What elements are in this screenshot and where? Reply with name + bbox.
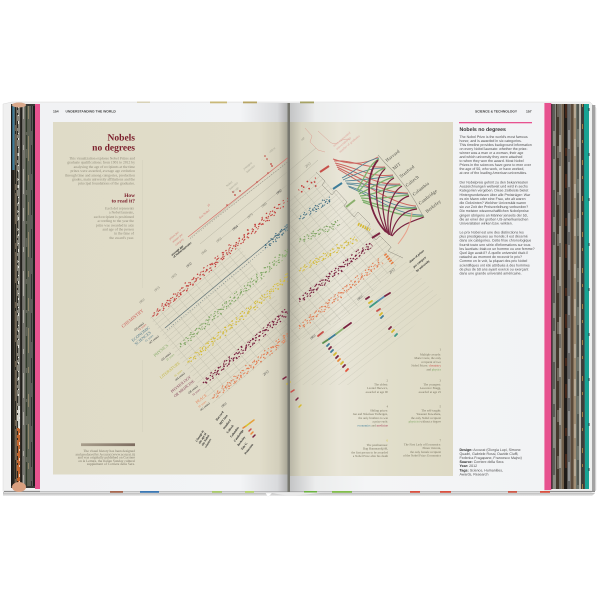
footer note: on la Lettura, the Italian Sunday cultural <box>78 459 135 463</box>
note 5: the only Nobel recipient <box>411 416 441 420</box>
French text: Quel âge avait-il? À quelle université était-il <box>460 250 528 255</box>
year labels: 1901 <box>220 401 228 409</box>
note 2: The oldest: <box>374 382 388 386</box>
page edge colour tabs <box>110 102 550 493</box>
left page header: 154 <box>53 109 59 113</box>
label: economic sciences <box>130 325 160 346</box>
label: physics: 25 years <box>165 352 176 362</box>
year labels: 1992 <box>275 188 283 196</box>
heading: how to read it <box>111 193 135 204</box>
label: physics: (55 years) <box>160 351 172 362</box>
note 3 <box>419 378 441 394</box>
how to read text: Each dot represents <box>105 206 135 210</box>
dark list: category legend: the age of <box>197 431 208 445</box>
year labels: 1985 <box>260 201 268 209</box>
note 5: 5 <box>439 404 441 408</box>
dark list: chart key: share of prizes <box>408 248 426 264</box>
dark list: universities: Yale U. <box>240 441 249 451</box>
top legend: prizes per category: by age <box>231 185 240 194</box>
title: no degrees <box>92 144 135 154</box>
note 1: 1 <box>439 348 441 352</box>
chart grid <box>150 128 442 404</box>
dark list: chart key: per category <box>412 255 427 269</box>
note 4: 4 <box>386 404 388 408</box>
dark list: universities: Cambridge <box>233 428 245 443</box>
year labels: 1901 <box>356 294 364 302</box>
heading: how to read it: to read it? <box>111 198 135 204</box>
German text: sie zur Zeit der Preisverleihung verbunden? <box>460 205 528 209</box>
title <box>92 134 135 154</box>
dark list: category legend <box>194 429 213 449</box>
credits: Awards, Research <box>460 472 488 476</box>
German text: Der Nobelpreis gehört zu den bekanntesten <box>460 180 528 184</box>
label: physics: PHYSICS <box>152 342 170 358</box>
how to read text: according to the year the <box>98 219 134 223</box>
English text: at one of the leading American universities. <box>460 171 527 175</box>
English text: This timeline provides background information <box>460 143 532 147</box>
note 7: 7 <box>439 438 441 442</box>
top legend: prizes per category: winner per <box>171 232 184 244</box>
label: chemistry: 72 years <box>137 322 148 332</box>
note 4: Jan and Nikolaas Tinbergen, <box>353 412 388 416</box>
university flows: burgundy <box>369 160 424 236</box>
year labels: 1975 <box>246 212 254 220</box>
top legend: prizes per category: 26 <box>206 202 211 208</box>
year labels: 2012 <box>262 369 270 377</box>
label: physiology or medicine: PHYSIOLOGY <box>170 375 192 394</box>
left page <box>40 103 290 492</box>
how to read text: and age of the person <box>102 228 134 232</box>
how to read text: a Nobel laureate, <box>109 211 134 215</box>
label: economic sciences: ECONOMIC <box>130 325 151 343</box>
dots: literature <box>187 236 358 363</box>
dark list: universities: Princeton <box>243 443 254 455</box>
label: physiology or medicine: OR MEDICINE <box>173 379 196 398</box>
top legend: prizes per category: prizes per <box>168 230 180 241</box>
note 1: and physics <box>426 367 442 371</box>
top legend: prizes per category: oldest <box>268 146 276 154</box>
pink page edges <box>35 103 551 490</box>
French text: scientifiques ont été attribués à des hommes <box>460 263 530 267</box>
university labels: Cambridge <box>418 188 438 206</box>
university labels: Caltech <box>405 174 420 188</box>
dark list: universities: Harvard <box>215 410 225 422</box>
dots: physiology or medicine <box>202 242 373 384</box>
top legend: prizes per category: first Nobel <box>198 208 211 220</box>
note 1: recipient of two <box>421 360 441 364</box>
university labels: Harvard <box>385 148 401 163</box>
credits: Source: Corriere della Sera <box>460 460 503 464</box>
footer note: The visual history has been designed <box>83 449 135 453</box>
top legend: prizes per category: of Nobel laureates <box>172 240 193 259</box>
university labels: Berkeley <box>425 198 442 214</box>
English text: to when they won the award. Most Nobel <box>460 159 524 163</box>
note 6: Dag Hammarskjöld, <box>363 447 388 451</box>
credits <box>460 448 522 476</box>
English text: winner was a man or a woman, their age <box>460 151 523 155</box>
note 6: 6 <box>386 438 388 442</box>
dark list: universities: Caltech <box>225 424 235 434</box>
year labels: 1925 <box>170 272 178 280</box>
label: peace: 35 years <box>197 399 208 409</box>
label: economic sciences: 61 years <box>144 333 155 343</box>
note 3: The youngest: <box>423 382 441 386</box>
university flows: red <box>333 157 416 206</box>
top legend: prizes per category: Nobel <box>225 180 233 188</box>
English text: Prizes in the sciences have gone to men over <box>460 163 532 167</box>
note 1: Marie Curie, the only <box>414 356 441 360</box>
credits: Tags: Science, Humanities, <box>460 468 503 472</box>
dots: chemistry <box>152 177 317 317</box>
how to read text: in the time of <box>114 232 135 236</box>
French text: Le prix Nobel est une des distinctions les <box>460 230 524 234</box>
German text: Kategorien vergeben. Diese Zeitleiste bietet <box>460 189 528 193</box>
intro text: prizes were awarded, average age evolution <box>70 169 135 173</box>
gutter fold <box>268 103 325 496</box>
note 4: economics and medicine <box>357 423 389 427</box>
note 4 <box>353 404 389 427</box>
French text: dans une grande université américaine. <box>460 272 522 276</box>
intro text: principal foundations of the graduates. <box>78 182 135 186</box>
German text <box>460 180 531 226</box>
footer rule <box>81 443 135 446</box>
year labels: 1964 <box>231 224 239 232</box>
note 6: a Nobel Prize after his death <box>353 454 388 458</box>
label: chemistry: CHEMISTRY <box>120 308 146 330</box>
university bracket <box>378 155 424 218</box>
mini bars: 2012 group <box>283 377 301 407</box>
label: peace: (61 years) <box>199 401 211 412</box>
university labels: MIT <box>392 161 402 171</box>
credits: Design: Accurat (Giorgia Lupi, Simone <box>460 448 521 452</box>
credits: Quadri, Gabriele Rossi, Davide Ciuffi, <box>460 452 518 456</box>
university flows: blue <box>342 158 423 215</box>
top legend: prizes per category: laureates <box>245 163 256 174</box>
right page <box>290 103 544 492</box>
note 6: The posthumous: <box>367 443 388 447</box>
German text: gingen übrigens an Männer jenseits der 50, <box>460 213 528 217</box>
footer note <box>76 449 136 466</box>
right page edge stack <box>551 104 592 490</box>
note 7: The First Lady of Economics: <box>404 442 441 446</box>
note 3: 3 <box>439 378 441 382</box>
note 1: Nobel Prizes: chemistry <box>411 364 441 368</box>
English text: honor, and is awarded in six categories. <box>460 139 522 143</box>
top age line <box>188 155 290 239</box>
top right pink legend: number of graduates <box>338 133 361 154</box>
dark list: category legend: Change in <box>194 429 205 443</box>
intro text: This visualization explores Nobel Prizes and <box>69 156 135 160</box>
top right pink legend: most represented <box>332 131 352 148</box>
top right pink legend: universities by <box>335 135 352 151</box>
dark list: universities <box>215 410 254 455</box>
label: literature: LITERATURE <box>158 360 181 380</box>
mini bars: middle stacked group <box>318 323 351 371</box>
French text: Comme on le voit, la plupart des prix Nobel <box>460 259 528 263</box>
French text: dans six catégories. Cette frise chronologique <box>460 239 531 243</box>
how to read text: each recipient is positioned <box>94 215 134 219</box>
book cover shadow <box>3 102 596 497</box>
note 7 <box>403 438 442 458</box>
label: physiology or medicine <box>170 375 202 398</box>
dark list: category legend: winners <box>203 437 213 449</box>
right page header: SCIENCE & TECHNOLOGY <box>475 109 518 113</box>
note 6 <box>351 438 388 458</box>
category summary bars <box>320 166 393 264</box>
dark list: universities: Columbia <box>229 425 240 438</box>
how to read text <box>94 206 135 240</box>
mini bars: right stacked group <box>366 293 397 336</box>
German text: Die meisten wissenschaftlichen Nobelpreise <box>460 209 529 213</box>
year labels <box>138 161 396 409</box>
how to read text: prize was awarded in axis <box>96 223 135 227</box>
intro text: analysing the age of recipients at the time <box>74 165 135 169</box>
top legend: prizes per category <box>168 146 276 259</box>
note 4: the only brothers to win <box>358 416 388 420</box>
year labels: 1945 <box>200 248 208 256</box>
footer note: and produced by Accurat (www.accurat.it) <box>76 452 136 456</box>
English text <box>460 135 532 175</box>
year labels: 1915 <box>153 285 161 293</box>
left page header: UNDERSTANDING THE WORLD <box>66 109 116 113</box>
note 5 <box>409 404 442 424</box>
top legend: prizes per category: youngest <box>242 161 253 171</box>
note 7: Elinor Ostrom, <box>422 446 441 450</box>
year labels: 1932 <box>185 261 193 269</box>
English text: and which university they were attached <box>460 155 522 159</box>
panel: beige infographic left <box>53 122 288 474</box>
German text: Universitäten wirken bzw. wirkten. <box>460 222 513 226</box>
label: chemistry: (59 years) <box>133 321 145 332</box>
note 4: Sibling prizes: <box>370 408 388 412</box>
pink rule <box>459 122 532 123</box>
university flows: peace <box>398 212 412 244</box>
note 2: awarded at age 90 <box>366 390 388 394</box>
left page edge stack <box>11 102 35 492</box>
intro text <box>65 156 135 186</box>
note 7: of the Nobel Prize: Economics <box>403 454 442 458</box>
dark list: chart key: by university <box>415 259 431 273</box>
dots: peace <box>212 258 384 399</box>
English text: the age of 50, who work, or have worked, <box>460 167 524 171</box>
note 3: Lawrence Bragg, <box>420 386 441 390</box>
label: peace <box>194 392 211 412</box>
note 7: the only female recipient <box>410 450 441 454</box>
year labels: 2012 <box>304 161 312 169</box>
top right pink legend <box>300 131 361 154</box>
how to read text: the award's year. <box>109 236 134 240</box>
German text: Hintergrundwissen über alle Preisträger: War <box>460 193 531 197</box>
note 5: The self-taught: <box>421 408 441 412</box>
intro text: grades, main university affiliations and the <box>72 178 135 182</box>
German text: die an einer der großen US-amerikanischen <box>460 217 528 221</box>
label: literature: 41 years <box>173 368 184 378</box>
top legend: prizes per category: laureates <box>228 180 239 191</box>
dark list: chart key <box>408 248 431 273</box>
French text: les lauréats: était-ce un homme ou une femme? <box>460 247 535 251</box>
note 1: Multiple awards: <box>420 352 441 356</box>
footer note: and was originally published on Corriere <box>78 456 135 460</box>
university labels <box>385 148 442 214</box>
credits: Federica Fragapane, Francesco Majno) <box>460 456 522 460</box>
panel: beige infographic right <box>290 122 453 476</box>
credits: Year: 2012 <box>460 464 477 468</box>
note 4: a prize each: <box>372 420 388 424</box>
label: literature: (64 years) <box>174 371 186 382</box>
note 2: 2 <box>386 378 388 382</box>
dots: economic sciences <box>164 196 330 330</box>
university labels: Columbia <box>412 181 430 197</box>
right page header: 157 <box>526 109 532 113</box>
label: physiology or medicine: (58 years) <box>187 384 199 395</box>
right page heading: Nobels no degrees <box>460 127 506 133</box>
intro text: graduate qualifications: from 1901 to 2012 by <box>67 161 135 165</box>
mini bars: 1901 group <box>243 420 255 437</box>
note 2 <box>366 378 388 394</box>
note 5: physicist without a degree <box>409 420 442 424</box>
heading: how to read it: How <box>124 193 135 199</box>
French text: plus prestigieuses au monde; il est décerné <box>460 235 528 239</box>
column rule <box>142 160 144 432</box>
intro text: through time and among categories, production <box>65 173 135 177</box>
English text: on every Nobel laureate: whether the prize- <box>460 147 528 151</box>
label: physiology or medicine: 32 years <box>191 387 202 397</box>
French text: de plus de 50 ans ayant exercé ou exerçant <box>460 267 528 271</box>
English text: The Nobel Prize is the world's most famous <box>460 135 528 139</box>
year labels: 2012 <box>388 267 396 275</box>
German text: die Gekrönten? Welcher Universität waren <box>460 201 526 205</box>
label: peace: PEACE <box>194 392 208 405</box>
dark list: universities: Stanford <box>222 418 232 430</box>
note 6: the first person to be awarded <box>351 450 388 454</box>
footer note: supplement of Corriere della Sera. <box>87 462 135 466</box>
dark list: universities: MIT Inst. <box>218 413 229 426</box>
German text: Auszeichnungen weltweit und wird in sechs <box>460 185 528 189</box>
title: Nobels <box>108 134 135 144</box>
note 1 <box>411 348 442 371</box>
French text: fournit toute une série d'informations sur tous <box>460 243 531 247</box>
note 5: Yasunari Kawabata, <box>416 412 441 416</box>
label: economic sciences: SCIENCES <box>133 330 153 346</box>
top legend: prizes per category: average age <box>170 244 185 257</box>
top legend: prizes per category: category <box>174 237 185 247</box>
label: economic sciences: (67 years) <box>148 334 160 345</box>
dots: physics <box>180 220 340 348</box>
note 3: awarded at age 25 <box>419 390 441 394</box>
dark list: universities: Berkeley <box>236 435 247 447</box>
German text: es ein Mann oder eine Frau, wie alt waren <box>460 197 526 201</box>
year labels: 1955 <box>215 236 223 244</box>
label: physics <box>152 342 176 362</box>
top right pink legend: age <box>300 135 306 142</box>
dark list: category legend: the Nobel <box>200 434 210 447</box>
French text: rattaché au moment de recevoir le prix? <box>460 255 522 259</box>
year labels: 1901 <box>138 297 146 305</box>
university flows: green <box>357 159 424 216</box>
French text <box>460 230 535 276</box>
year labels: 1901 <box>309 333 317 341</box>
university labels: Stanford <box>399 164 416 179</box>
note 2: Leonid Hurwicz, <box>367 386 388 390</box>
